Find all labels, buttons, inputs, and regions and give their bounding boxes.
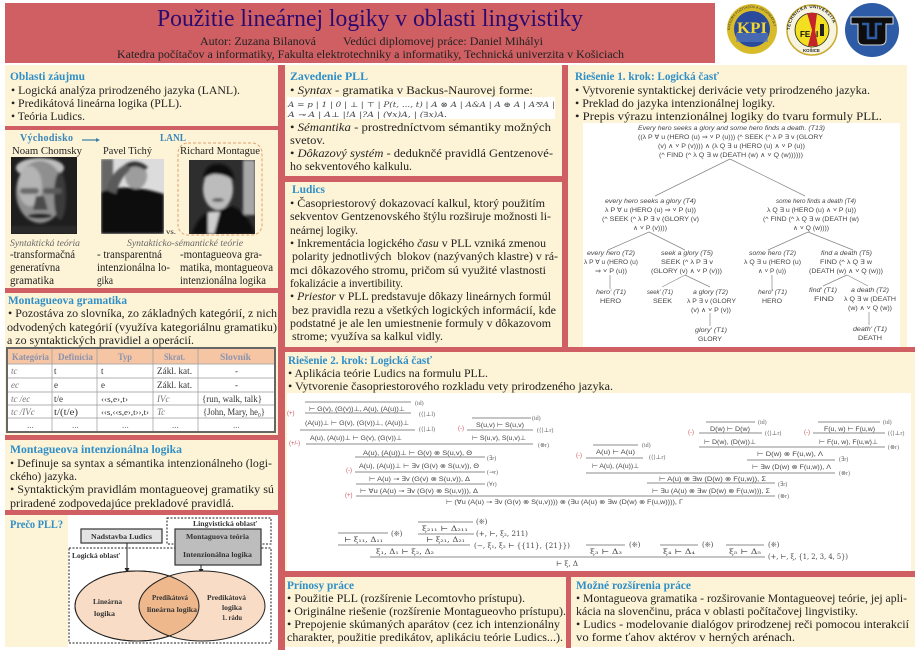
venn diagram: logika xyxy=(222,603,242,612)
list: • Použitie PLL (rozšírenie Lecomtovho prístupu). xyxy=(287,591,525,605)
table: ec xyxy=(11,380,19,390)
box: Nadstavba Ludics xyxy=(81,529,162,543)
names: Pavel Tichý xyxy=(103,146,153,157)
logo: KPI: KATEDRA POČÍTAČOV A INFORMATIKY xyxy=(728,5,776,30)
list: • Vytvorenie syntaktickej derivácie vety prirodzeného jazyka. xyxy=(575,83,870,97)
rule names: (⟨⟩⊥l) xyxy=(419,411,435,418)
table: Kategória xyxy=(12,353,49,363)
sequents: ⊢ D(w), (D(w))⊥ xyxy=(704,439,756,446)
derivation tree xyxy=(583,123,900,347)
node: find a death: (DEATH (w) ∧ ˅ Q (w))) xyxy=(809,268,883,275)
list: • Aplikácia teórie Ludics na formulu PLL. xyxy=(288,366,488,380)
rule names: (⊗r) xyxy=(778,493,789,500)
paragraph: ckého) jazyka. xyxy=(10,469,77,483)
time paragraph: • Časopriestorový dokazovací kalkul, ktorý použitím xyxy=(290,196,546,210)
names: Richard Montague xyxy=(180,146,260,157)
venn diagram: Predikátová xyxy=(207,593,246,602)
table: {John, Mary, he₀} xyxy=(203,407,265,417)
sequents: S(u,v) ⊢ S(u,v) xyxy=(476,422,524,429)
space paragraph xyxy=(290,289,556,343)
list xyxy=(575,83,882,123)
heading: Montagueova intenzionálna logika xyxy=(10,442,182,456)
logo: KPI xyxy=(727,4,777,54)
node: some hero: λ Q ∃ u (HERO (u) xyxy=(744,259,801,266)
proof tree: abstract ludics design: (❊) xyxy=(768,541,780,549)
panel: Oblasti záujmu xyxy=(5,65,278,126)
table: tc xyxy=(11,366,18,376)
table: t xyxy=(101,366,104,376)
node: T13: (v) ∧ ˅ P (v)))) ∧ (λ Q ∃ u (HERO (u) ∧ ˅ P (u)) xyxy=(658,143,805,150)
table: t/e xyxy=(54,394,63,404)
proof system xyxy=(290,146,553,173)
box: Montaguova teória: Montaguova teória xyxy=(186,532,249,541)
table: ... xyxy=(122,420,129,430)
node: some hero: ∧ ˅ P (u)) xyxy=(758,268,786,275)
separator xyxy=(5,510,278,515)
increment paragraph: fokalizácie a invertibility. xyxy=(290,276,403,290)
panel: Prečo PLL xyxy=(5,515,278,647)
list: • Originálne riešenie (rozšírenie Montagueovho prístupu). xyxy=(287,604,566,618)
table: ... xyxy=(233,420,240,430)
list: • Ludics - modelovanie dialógov prirodzenej reči pomocou interakcií xyxy=(576,617,910,631)
venn diagram: logika xyxy=(94,609,115,618)
proof tree: abstract ludics design: (❊) xyxy=(476,518,488,526)
column: montagueova: matika, montagueova xyxy=(180,260,274,274)
node: T13: (^ FIND (^ λ Q ∃ w (DEATH (w) ∧ ˅ Q (w)))))) xyxy=(659,152,803,159)
inference lines xyxy=(300,402,885,496)
table: ... xyxy=(27,420,34,430)
rule names: (∃r) xyxy=(487,455,496,462)
polarity marks: (+) xyxy=(287,411,295,417)
column: transparentná xyxy=(97,247,170,287)
heading: Zavedenie PLL xyxy=(290,69,368,83)
node: seek a glory: SEEK xyxy=(653,298,673,305)
node: seek a glory: a glory (T2) xyxy=(693,289,728,296)
proof tree: abstract ludics design: (−, ξ₁, ξ₂ ⊢ {{11}, {21}}) xyxy=(474,542,570,550)
rule names: (id) xyxy=(758,419,767,426)
polarity marks xyxy=(287,411,810,499)
label: vs: vs. xyxy=(166,228,176,236)
heading: Prínosy práce xyxy=(287,578,355,592)
list xyxy=(576,591,910,644)
panel: Zavedenie PLL xyxy=(285,65,562,176)
rule names: (⊸r) xyxy=(487,469,498,476)
box: Nadstavba Ludics: Nadstavba Ludics xyxy=(91,532,152,541)
list: • Preklad do jazyka intenzionálnej logiky. xyxy=(575,96,775,110)
node: T13 xyxy=(638,125,825,159)
formula xyxy=(287,97,555,119)
sequents xyxy=(305,406,878,506)
column separators xyxy=(278,65,915,650)
region: logická oblasť xyxy=(69,548,271,643)
column: transformačná: gramatika xyxy=(10,273,55,287)
node: every hero: λ P ∀ u (HERO (u) xyxy=(584,259,638,266)
list: • Logická analýza prirodzeného jazyka (LANL). xyxy=(11,83,240,97)
paragraph: • Definuje sa syntax a sémantika intenzionálneho (logi- xyxy=(10,456,272,470)
sequents: ⊢ G(v), (G(v))⊥, A(u), (A(u))⊥ xyxy=(309,406,405,413)
region: lingvistická oblasť xyxy=(167,518,271,544)
node: seek a glory: λ P ∃ v (GLORY xyxy=(687,298,737,305)
node: left T4: (^ SEEK (^ λ P ∃ v (GLORY (v) xyxy=(602,216,699,223)
rule names: (⟨⟩⊥r) xyxy=(765,430,781,437)
proof tree: abstract ludics design: ξ₃ ⊢ Δ₃ xyxy=(590,548,622,556)
heading: Montagueova gramatika xyxy=(8,293,127,307)
table: t xyxy=(54,366,57,376)
panel: Montagueova intenzionálna logika xyxy=(5,440,278,510)
rule names: (id) xyxy=(415,400,424,407)
list: • Predikátová lineárna logika (PLL). xyxy=(11,96,182,110)
node: every hero: hero' (T1) xyxy=(596,289,626,296)
node: right T4: λ Q ∃ u (HERO (u) ∧ ˅ P (u)) xyxy=(767,207,856,214)
proof tree: abstract ludics design: (❊) xyxy=(702,541,714,549)
node: left T4: ∧ ˅ P (v)))) xyxy=(633,225,667,232)
venn diagram: Predikátová xyxy=(152,593,188,602)
rule names: (⊗r) xyxy=(888,444,899,451)
panel: Montagueova gramatika xyxy=(5,293,278,435)
table: - xyxy=(235,380,238,390)
list: • Montagueova gramatika - rozširovanie Montagueovej teórie, jej apli- xyxy=(576,591,907,605)
proof tree: sentence decomposition xyxy=(287,400,904,506)
photo: Richard Montague xyxy=(189,160,255,234)
arrow xyxy=(82,138,100,142)
increment paragraph xyxy=(290,236,558,290)
polarity marks: (-) xyxy=(458,426,464,432)
rule names: (id) xyxy=(532,415,541,422)
rule names: (id) xyxy=(642,442,651,449)
list: • Teória Ludics. xyxy=(11,109,85,123)
formula: A ⊸ A | A⊥ |!A |?A | (∀x)A, | (∃x)A. xyxy=(287,111,447,119)
node: right T4: (^ FIND (^ λ Q ∃ w (DEATH (w) xyxy=(763,216,859,223)
list xyxy=(11,83,240,123)
table: e xyxy=(101,380,105,390)
rule names: (⊗r) xyxy=(839,470,850,477)
paragraph: odvodených kategórií (využíva kategoriálnu gramatiku) xyxy=(7,320,277,334)
heading: Riešenie 1. krok: Logická časť xyxy=(575,69,720,83)
table: Slovník xyxy=(220,353,252,363)
proof tree: abstract ludics design: (+, ⊢, ξ, {1, 2, 3, 4, 5}) xyxy=(768,553,848,561)
space paragraph: bez pravidla rezu a všetkých logických informácií, kde xyxy=(292,303,556,317)
node: T13: ((λ P ∀ u (HERO (u) ⇒ ˅ P (u))) (^ SEEK (^ λ P ∃ v (GLORY xyxy=(638,134,824,141)
rule names: (⟨⟩⊥l) xyxy=(419,426,435,433)
arrow: intensional logic to predicate logic xyxy=(200,565,202,573)
sequents: ⊢ ∃w (D(w) ⊗ F(u,w)), Λ xyxy=(752,464,832,471)
table: ... xyxy=(72,420,79,430)
space paragraph: podstatné je ale len umiestnenie formuly v dôkazovom xyxy=(290,316,552,330)
table: Zákl. kat. xyxy=(157,380,192,390)
separator xyxy=(5,435,278,440)
rule names: (∃r) xyxy=(839,456,848,463)
node: every hero: ⇒ ˅ P (u)) xyxy=(595,268,627,275)
polarity marks: (-) xyxy=(804,430,810,436)
table: ... xyxy=(172,420,179,430)
panel: Ludics xyxy=(285,182,562,347)
semantics: • Sémantika - prostredníctvom sémantiky možných xyxy=(290,120,551,134)
tree branches xyxy=(608,159,869,326)
rule names: (id) xyxy=(883,419,892,426)
table: ‹‹s,e›,t› xyxy=(101,395,128,404)
header xyxy=(5,3,715,63)
node: find a death: find' (T1) xyxy=(809,287,837,294)
node: find a death xyxy=(809,250,896,342)
rule names: (∃r) xyxy=(778,481,787,488)
heading: Ludics xyxy=(292,182,325,196)
node: seek a glory: glory' (T1) xyxy=(695,327,727,334)
node: left T4: every hero seeks a glory (T4) xyxy=(605,198,696,205)
list xyxy=(287,591,566,644)
node: seek a glory: SEEK (^ λ P ∃ v xyxy=(661,259,714,266)
table: t/(t/e) xyxy=(54,407,78,417)
supervisor: Vedúci diplomovej práce: Daniel Mihályi xyxy=(343,34,544,48)
rule names: (∀r) xyxy=(487,481,497,488)
label: LANL: LANL xyxy=(160,133,186,144)
photo: Pavel Tichý xyxy=(101,159,164,234)
proof tree: abstract ludics design: (❊) xyxy=(629,541,641,549)
panel: Možné rozšírenia práce xyxy=(571,577,915,647)
title: Použitie lineárnej logiky v oblasti lingvistiky xyxy=(157,6,583,32)
paragraph xyxy=(10,456,274,510)
sequents: A(u), (A(u))⊥ ⊢ ∃v (G(v) ⊗ S(u,v)), Θ xyxy=(359,463,479,470)
logo: FEI: FE xyxy=(800,30,811,39)
column: montagueova: -montagueova gra- xyxy=(180,247,262,261)
sequents: ⊢ ∀u (A(u) ⊸ ∃v (G(v) ⊗ S(u,v))), Δ xyxy=(360,488,479,495)
column: transparentná: intenzionálna lo- xyxy=(97,260,170,274)
node: seek a glory xyxy=(647,250,737,343)
node: T13: Every hero seeks a glory and some hero finds a death. (T13) xyxy=(638,125,825,132)
sequents: A(u) ⊢ A(u) xyxy=(596,449,635,456)
rule names: (⊗r) xyxy=(538,442,549,449)
node: seek a glory: seek' (T1) xyxy=(647,289,673,296)
department: Katedra počítačov a informatiky, Fakulta elektrotechniky a informatiky, Technická univerzita v Košiciach xyxy=(117,47,624,61)
box: Montaguova teória xyxy=(175,529,261,565)
logo: KPI: KPI xyxy=(737,20,767,37)
node: find a death: λ Q ∃ w (DEATH xyxy=(844,296,896,303)
list: charakter, použitie predikátov, aplikáciu teórie Ludics...). xyxy=(287,630,563,644)
dashed highlight xyxy=(178,143,262,235)
sequents: A(u), (A(u))⊥ ⊢ G(v) ⊗ S(u,v), Θ xyxy=(363,450,472,457)
sequents: (A(u))⊥ ⊢ G(v), (G(v))⊥, (A(u))⊥ xyxy=(305,420,409,427)
proof tree: abstract ludics design: ξ₂₁₁ ⊢ Δ₂₁₁ xyxy=(422,525,468,533)
venn diagram xyxy=(75,571,265,641)
node: right T4: some hero finds a death (T4) xyxy=(776,198,856,205)
captions xyxy=(10,238,243,248)
photo: Noam Chomsky xyxy=(11,157,77,234)
captions: Syntaktická teória xyxy=(10,238,81,248)
table: Zákl. kat. xyxy=(157,366,192,376)
increment paragraph: mci dôkazového stromu, pričom sú využité vlastnosti xyxy=(290,263,547,277)
label: Východisko: Východisko xyxy=(20,133,73,144)
node: find a death: a death (T2) xyxy=(851,287,889,294)
time paragraph xyxy=(290,196,551,237)
node: every hero: every hero (T2) xyxy=(587,250,635,257)
polarity marks: (-) xyxy=(346,468,352,474)
logo: FEI: TECHNICKÁ UNIVERZITA xyxy=(787,5,836,30)
sequents: ⊢ A(u) ⊸ ∃v (G(v) ⊗ S(u,v)), Δ xyxy=(369,476,471,483)
increment paragraph: • Inkrementácia logického času v PLL vzniká zmenou xyxy=(290,236,546,250)
proof tree: abstract ludics design: ⊢ ξ₁₁, Δ₁₁ xyxy=(344,536,383,544)
syntax: • Syntax - gramatika v Backus-Naurovej forme: xyxy=(290,83,533,97)
logo: FEI: I xyxy=(816,30,818,39)
column: transformačná: generatívna xyxy=(10,260,61,274)
proof tree: abstract ludics design: ⊢ ξ, Δ xyxy=(556,560,578,568)
node: left T4: λ P ∀ u (HERO (u) ⇒ ˅ P (u)) xyxy=(605,207,696,214)
sequents: D(w) ⊢ D(w) xyxy=(710,426,750,433)
node: right T4: ∧ ˅ Q (w)))) xyxy=(793,225,829,232)
paragraph: a zo syntaktických pravidiel a operácií. xyxy=(7,333,194,347)
rule names: (⟨⟩⊥r) xyxy=(888,430,904,437)
node: seek a glory: GLORY xyxy=(698,336,723,343)
separator xyxy=(285,176,562,182)
node: left T4 xyxy=(602,198,699,232)
table: Skrat. xyxy=(164,353,185,363)
rule names: (⟨⟩⊥r) xyxy=(649,454,665,461)
paragraph: • Pozostáva zo slovníka, zo základných kategórií, z nich xyxy=(8,306,277,320)
panel: Prínosy práce xyxy=(285,577,566,647)
table: tc /ec xyxy=(11,394,30,404)
logo: FEI: KOŠICE xyxy=(803,48,820,53)
sequents: ⊢ ∃u (A(u) ⊗ ∃w (D(w) ⊗ F(u,w))), Σ xyxy=(652,488,770,495)
venn diagram: 1. rádu xyxy=(222,613,242,622)
node: find a death: find a death (T5) xyxy=(821,250,872,257)
table: Definícia xyxy=(58,353,93,363)
increment paragraph: polarity jednotlivých blokov (nazývaných klastre) v rá- xyxy=(292,249,558,263)
list: • Prepis výrazu intenzionálnej logiky do tvaru formuly PLL. xyxy=(575,109,882,123)
node: find a death: FIND (^ λ Q ∃ w xyxy=(820,259,872,266)
author: Autor: Zuzana Bilanová xyxy=(200,34,317,48)
semantics xyxy=(290,120,551,147)
table: e xyxy=(54,380,58,390)
node: find a death: FIND xyxy=(814,296,834,303)
table: tc /IVc xyxy=(11,407,35,417)
node: seek a glory: (v) ∧ ˅ P (v)) xyxy=(691,307,731,314)
logo: TU xyxy=(845,3,899,57)
region: lingvistická oblasť: Lingvistická oblasť xyxy=(193,519,257,528)
node: seek a glory: seek a glory (T5) xyxy=(661,250,713,257)
region: logická oblasť: Logická oblasť xyxy=(72,551,120,560)
arrow: Ludics to linear logic xyxy=(126,543,128,572)
node: some hero: HERO xyxy=(762,298,782,305)
time paragraph: neárnej logiky. xyxy=(290,223,358,237)
space paragraph: • Priestor v PLL predstavuje dôkazy lineárnych formúl xyxy=(290,289,552,303)
proof tree: abstract ludics design: ξ₅ ⊢ Δ₅ xyxy=(729,548,761,556)
sequents: ⊢ F(u, w), F(u,w)⊥ xyxy=(819,439,878,446)
proof tree: abstract ludics design xyxy=(338,518,848,568)
rule names xyxy=(415,400,904,500)
column: transparentná: - transparentná xyxy=(97,247,163,261)
list: • Vytvorenie časopriestorového rozkladu vety prirodzeného jazyka. xyxy=(288,379,613,393)
sequents: ⊢ A(u), (A(u))⊥ xyxy=(592,463,639,470)
sequents: ⊢ A(u) ⊗ ∃w (D(w) ⊗ F(u,w)), Σ xyxy=(659,476,766,483)
table: IVc xyxy=(156,394,170,404)
table: Tc xyxy=(157,407,165,417)
column: montagueova xyxy=(180,247,274,287)
semantics: svetov. xyxy=(290,133,325,147)
heading: Prečo PLL? xyxy=(10,517,63,531)
panel: Riešenie 1. krok xyxy=(568,65,907,347)
node: some hero: hero' (T1) xyxy=(758,289,787,296)
space paragraph: strome; využíva sa kalkul vidly. xyxy=(292,329,443,343)
column: transformačná xyxy=(10,247,76,287)
table: {run, walk, talk} xyxy=(202,394,262,404)
captions: Syntakticko-sémantické teórie xyxy=(127,238,243,248)
polarity marks: (-) xyxy=(576,453,582,459)
proof tree: abstract ludics design: ξ₄ ⊢ Δ₄ xyxy=(663,548,695,556)
node: find a death: DEATH xyxy=(858,335,882,342)
list: • Prepojenie skúmaných aparátov (cez ich intenzionálny xyxy=(287,617,560,631)
time paragraph: sekventov Gentzenovského štýlu rozširuje možnosti li- xyxy=(290,209,551,223)
panel: Riešenie 2. krok xyxy=(285,352,915,571)
table: ‹‹s,‹‹s,e›,t››,t› xyxy=(101,408,149,417)
names xyxy=(12,146,260,157)
box: Montaguova teória: Intenzionálna logika xyxy=(183,550,252,559)
list: vo forme ťahov aktérov v herných arénach. xyxy=(576,630,795,644)
diagram xyxy=(69,518,271,643)
list xyxy=(288,366,613,393)
names: Noam Chomsky xyxy=(12,146,83,157)
venn diagram: Lineárna xyxy=(93,597,122,606)
proof tree: abstract ludics design: (❊) xyxy=(391,530,403,538)
logo: FEI xyxy=(786,4,838,56)
paragraph xyxy=(7,306,277,347)
sequents: A(u), (A(u))⊥ ⊢ G(v), (G(v))⊥ xyxy=(310,435,402,442)
proof tree: abstract ludics design: ⊢ ξ₂₁, Δ₂₁ xyxy=(426,536,465,544)
table xyxy=(7,348,275,432)
venn diagram: lineárna logika xyxy=(147,605,197,614)
column: transparentná: gika xyxy=(97,273,114,287)
column: transformačná: -transformačná xyxy=(10,247,76,261)
proof system: ho sekventového kalkulu. xyxy=(290,159,412,173)
list: kácia na slovenčinu, práca v oblasti počítačovej lingvistiky. xyxy=(576,604,858,618)
node: every hero: HERO xyxy=(600,298,621,305)
node: seek a glory: (GLORY (v) ∧ ˅ P (v))) xyxy=(651,268,722,275)
sequents: ⊢ (∀u (A(u) ⊸ ∃v (G(v) ⊗ S(u,v)))) ⊗ (∃u (A(u) ⊗ ∃w (D(w) ⊗ F(u,w)))), Γ xyxy=(446,499,684,506)
column: montagueova: intenzionálna logika xyxy=(180,273,267,287)
paragraph: priradené zodpovedajúce prekladové pravidlá. xyxy=(10,496,234,510)
heading: Možné rozšírenia práce xyxy=(576,578,692,592)
sequents: F(u, w) ⊢ F(u,w) xyxy=(824,426,875,433)
panel: Východisko a LANL xyxy=(5,126,278,293)
node: every hero xyxy=(584,250,638,305)
heading: Oblasti záujmu xyxy=(10,69,85,83)
polarity marks: (+/-) xyxy=(289,441,300,447)
sequents: ⊢ D(w) ⊗ F(u,w), Λ xyxy=(757,451,824,458)
proof tree: abstract ludics design: ξ₁, Δ₁ ⊢ ξ₂, Δ₂ xyxy=(376,548,434,556)
table: - xyxy=(235,366,238,376)
node: find a death: (w) ∧ ˅ Q (w)) xyxy=(848,305,892,312)
rule names: (⟨⟩⊥r) xyxy=(537,427,553,434)
heading: Riešenie 2. krok: Logická časť xyxy=(288,353,433,367)
sequents: ⊢ S(u,v), S(u,v)⊥ xyxy=(472,435,526,442)
table: Typ xyxy=(118,353,132,363)
node: find a death: death' (T1) xyxy=(853,326,887,333)
polarity marks: (-) xyxy=(688,430,694,436)
node: right T4 xyxy=(763,198,859,232)
paragraph: • Syntaktickým pravidlám montagueovej gramatiky sú xyxy=(10,482,274,496)
node: some hero xyxy=(744,250,801,305)
proof system: • Dôkazový systém - deduknčé pravidlá Gentzenové- xyxy=(290,146,553,160)
node: some hero: some hero (T2) xyxy=(749,250,796,257)
formula: A = p | 1 | 0 | ⊥ | ⊤ | P(t, ..., t) | A ⊗ A | A&A | A ⊕ A | A⅋A | xyxy=(287,101,555,109)
polarity marks: (+) xyxy=(345,493,353,499)
proof tree: abstract ludics design: (+, ⊢, ξ₂, 211) xyxy=(476,530,528,538)
